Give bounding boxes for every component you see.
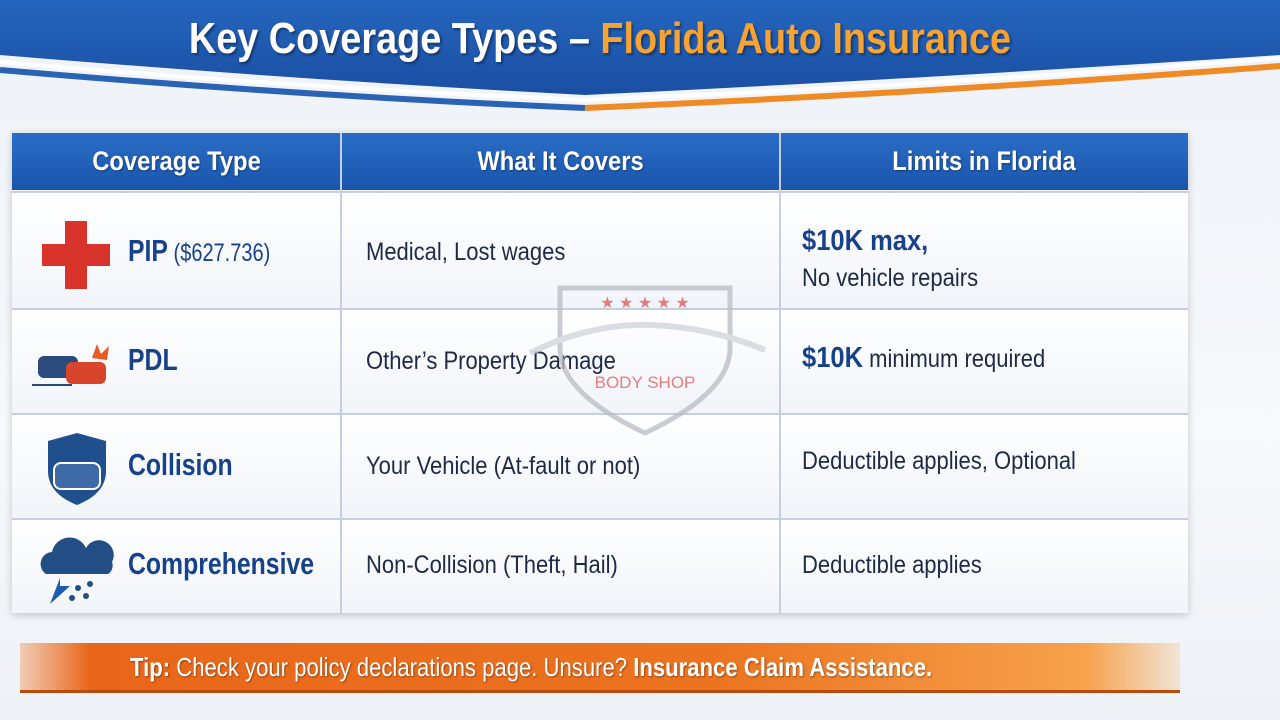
row: PIP (12, 191, 1188, 308)
tip bar (20, 643, 1180, 693)
title: Key Coverage Types – Florida Auto Insurance (189, 14, 1011, 63)
row: PDL: Other’s Property Damage (366, 347, 616, 375)
row: Collision (12, 413, 1188, 518)
row: PDL: PDL (128, 342, 178, 377)
table header: Coverage Type (92, 146, 261, 176)
icon: shield car (48, 433, 106, 505)
row: PDL: $10K minimum required (802, 342, 1045, 374)
row: Collision: Deductible applies, Optional (802, 447, 1076, 475)
row: PIP: $10K max, (802, 225, 928, 257)
row: PIP: Medical, Lost wages (366, 238, 565, 266)
header banner (0, 0, 1280, 111)
icon: cars crash (32, 344, 109, 386)
row: Comprehensive: Deductible applies (802, 551, 982, 579)
tip bar: Tip: Check your policy declarations page. Unsure? Insurance Claim Assistance. (130, 652, 932, 682)
row: Collision: Collision (128, 447, 233, 482)
table (12, 133, 1188, 613)
watermark logo: ★ ★ ★ ★ ★ (600, 295, 690, 312)
watermark logo (528, 286, 766, 436)
table header: What It Covers (477, 146, 644, 176)
table header: Limits in Florida (892, 146, 1076, 176)
row: Comprehensive: Comprehensive (128, 546, 314, 581)
row: Collision: Your Vehicle (At-fault or not) (366, 452, 640, 480)
row: Comprehensive: Non-Collision (Theft, Hail) (366, 551, 618, 579)
row: PIP: No vehicle repairs (802, 264, 978, 292)
icon: red cross (42, 221, 110, 289)
row: PDL (12, 308, 1188, 413)
row: Comprehensive (12, 518, 1188, 613)
watermark logo: BODY SHOP (595, 373, 695, 392)
table header (12, 133, 1188, 190)
icon: storm cloud (40, 538, 114, 604)
row: PIP: PIP ($627.736) (128, 233, 270, 268)
